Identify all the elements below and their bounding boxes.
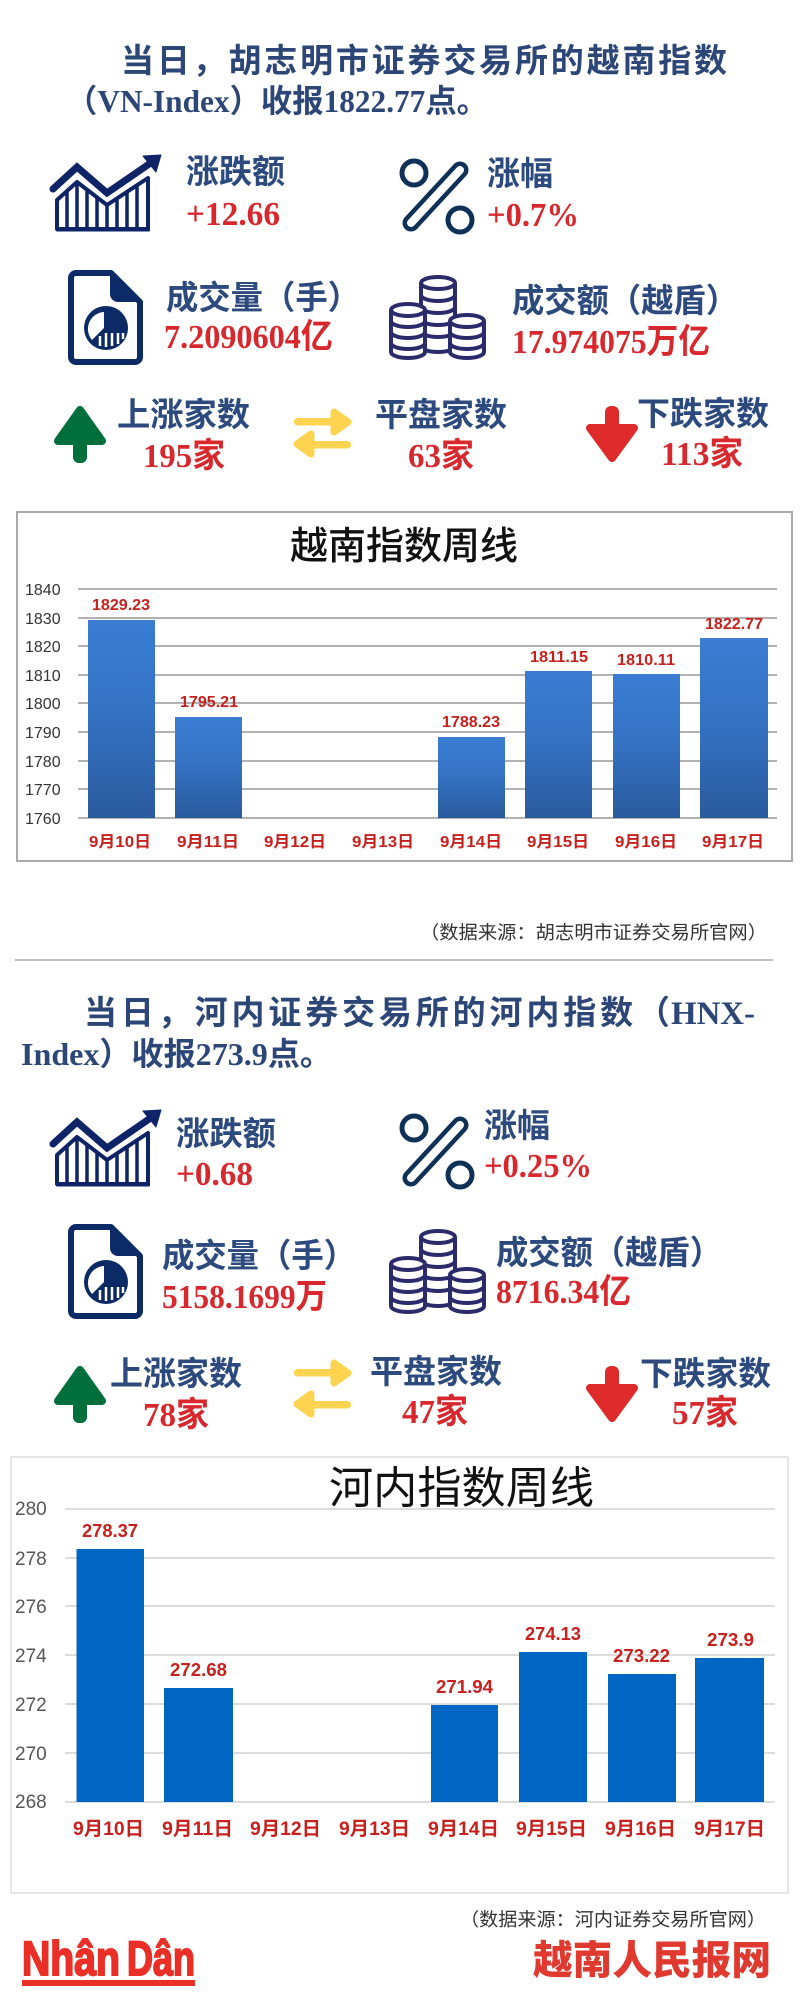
stat: change amount [176, 1107, 276, 1193]
title: VN-Index: 当日，胡志明市证券交易所的越南指数 [121, 34, 727, 82]
panel: VN-Index weekly chart: 1780 [25, 754, 61, 771]
logo: Nhan Dan [22, 1933, 195, 1986]
panel: HNX-Index weekly chart: 280 [15, 1499, 47, 1520]
stat: unchanged [375, 388, 507, 475]
stat: value [512, 274, 738, 361]
stat: volume [164, 271, 360, 356]
source note: HOSE: （数据来源：胡志明市证券交易所官网） [420, 919, 767, 945]
stat: unchanged: 平盘家数 [370, 1345, 502, 1393]
panel: VN-Index weekly chart: 1840 [25, 582, 61, 599]
stat: volume: 5158.1699万 [162, 1279, 327, 1316]
stat: value [496, 1226, 722, 1311]
stat: decliners [640, 1347, 771, 1432]
date axis: 9月15日 [516, 1819, 587, 1840]
icon: swap arrows [294, 1363, 351, 1414]
title: HNX-Index: 当日，河内证券交易所的河内指数（ [84, 986, 670, 1034]
title: VN-Index [66, 34, 727, 119]
stat: advancers [110, 1347, 242, 1434]
stat: change amount: 涨跌额 [176, 1107, 276, 1155]
stat: advancers: 195家 [143, 437, 225, 475]
icon: down arrow [590, 1366, 634, 1418]
data labels: 1795.21 [180, 694, 238, 711]
chart title: 越南指数周线 [290, 515, 518, 570]
icon: up arrow [58, 410, 102, 463]
stat: change amount [186, 145, 285, 233]
icon: document [71, 1225, 143, 1316]
stat: volume: 成交量（手） [162, 1229, 356, 1277]
data labels: 273.22 [613, 1646, 670, 1666]
data labels: 271.94 [436, 1677, 493, 1697]
panel: VN-Index weekly chart: 1820 [25, 639, 61, 656]
icon: down arrow [590, 406, 634, 458]
bars [88, 620, 768, 818]
stat: change amount: +12.66 [186, 196, 280, 233]
stat: change percent: +0.7% [487, 197, 579, 234]
data labels: 1788.23 [442, 714, 500, 731]
date axis: 9月11日 [162, 1819, 233, 1840]
title: HNX-Index: HNX- [671, 996, 755, 1032]
stat: change amount: 涨跌额 [186, 145, 285, 193]
date axis: 9月13日 [352, 834, 414, 851]
panel: VN-Index weekly chart: 1770 [25, 782, 61, 799]
data labels: 1822.77 [705, 616, 763, 633]
stat: volume: 7.2090604亿 [164, 318, 333, 356]
stat: decliners: 113家 [661, 435, 743, 473]
panel: HNX-Index weekly chart: 274 [15, 1646, 47, 1667]
stat: volume: 成交量（手） [166, 271, 360, 319]
stat: value: 8716.34亿 [496, 1273, 631, 1311]
stat: decliners [637, 387, 769, 473]
stat: unchanged [370, 1345, 502, 1431]
title: HNX-Index: Index）收报273.9点。 [21, 1036, 332, 1072]
panel: HNX-Index weekly chart: 272 [15, 1695, 47, 1716]
icon: up arrow [58, 1370, 102, 1423]
date axis [89, 834, 764, 851]
icon: trend chart [53, 1110, 161, 1186]
data labels [92, 597, 763, 731]
date axis: 9月14日 [428, 1819, 499, 1840]
icon: trend chart [53, 155, 161, 232]
stat: change percent: 涨幅 [484, 1099, 550, 1147]
stat: change percent [487, 147, 579, 234]
bars [76, 1549, 764, 1802]
chart title: 河内指数周线 [329, 1452, 594, 1516]
data labels: 272.68 [170, 1660, 227, 1680]
date axis: 9月14日 [440, 834, 502, 851]
date axis: 9月16日 [615, 834, 677, 851]
stat: advancers: 上涨家数 [110, 1347, 242, 1395]
data labels: 274.13 [525, 1624, 581, 1644]
source note: HNX: （数据来源：河内证券交易所官网） [460, 1906, 766, 1932]
stat: advancers: 78家 [143, 1396, 209, 1434]
date axis: 9月17日 [702, 834, 764, 851]
data labels: 278.37 [82, 1521, 138, 1541]
date axis: 9月16日 [605, 1819, 676, 1840]
panel: HNX-Index weekly chart: 276 [15, 1597, 47, 1618]
stat: decliners: 57家 [672, 1394, 738, 1432]
date axis: 9月17日 [694, 1819, 765, 1840]
title: HNX-Index [21, 986, 755, 1072]
logo: Nhan Dan: Dân [127, 1933, 195, 1986]
stat: unchanged: 63家 [408, 437, 474, 475]
stat: decliners: 下跌家数 [640, 1347, 771, 1395]
stat: change percent [484, 1099, 592, 1185]
data labels [82, 1521, 754, 1697]
icon: swap arrows [294, 412, 351, 454]
panel: VN-Index weekly chart [17, 512, 792, 861]
date axis: 9月11日 [177, 834, 239, 851]
stat: value: 成交额（越盾） [512, 274, 738, 322]
date axis: 9月12日 [264, 834, 326, 851]
data labels: 273.9 [707, 1630, 754, 1650]
panel: VN-Index weekly chart: 1810 [25, 668, 61, 685]
title: VN-Index: （VN-Index）收报1822.77点。 [66, 83, 488, 119]
panel: HNX-Index weekly chart: 278 [15, 1549, 47, 1570]
panel: HNX-Index weekly chart: 270 [15, 1744, 47, 1765]
stat: unchanged: 47家 [402, 1393, 468, 1431]
logo: site name: 越南人民报网 [533, 1928, 771, 1986]
stat: change percent: 涨幅 [487, 147, 553, 195]
date axis: 9月13日 [339, 1819, 410, 1840]
icon: percent [402, 161, 472, 232]
stat: value: 成交额（越盾） [496, 1226, 722, 1274]
stat: unchanged: 平盘家数 [375, 388, 507, 436]
icon: coins [391, 277, 484, 358]
date axis [73, 1819, 765, 1840]
data labels: 1829.23 [92, 597, 150, 614]
logo: Nhan Dan: Nhân [22, 1933, 120, 1986]
date axis: 9月10日 [73, 1819, 144, 1840]
stat: change percent: +0.25% [484, 1148, 592, 1185]
panel: VN-Index weekly chart: 1800 [25, 696, 61, 713]
panel: HNX-Index weekly chart [11, 1452, 788, 1893]
stat: decliners: 下跌家数 [637, 387, 769, 435]
icon: coins [391, 1231, 484, 1312]
data labels: 1810.11 [617, 652, 675, 669]
icon: percent [402, 1116, 472, 1187]
panel: VN-Index weekly chart: 1760 [25, 811, 61, 828]
data labels: 1811.15 [530, 649, 588, 666]
icon: document [71, 271, 143, 362]
stat: value: 17.974075万亿 [512, 323, 710, 361]
stat: advancers [117, 388, 250, 475]
stat: change amount: +0.68 [176, 1156, 253, 1193]
panel: VN-Index weekly chart: 1790 [25, 725, 61, 742]
panel: VN-Index weekly chart: 1830 [25, 611, 61, 628]
date axis: 9月15日 [527, 834, 589, 851]
stat: advancers: 上涨家数 [117, 388, 250, 436]
stat: volume [162, 1229, 356, 1316]
panel: HNX-Index weekly chart: 268 [15, 1792, 47, 1813]
date axis: 9月12日 [250, 1819, 321, 1840]
date axis: 9月10日 [89, 834, 151, 851]
